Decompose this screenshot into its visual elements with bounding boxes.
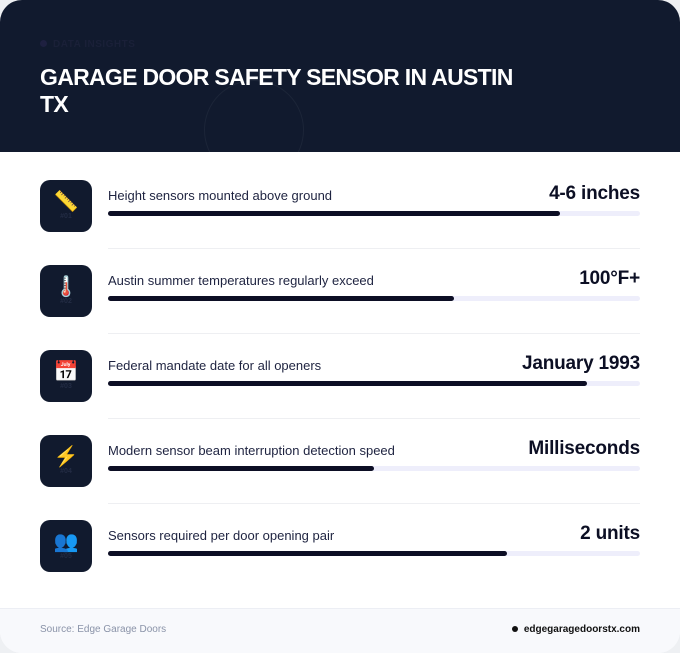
icon: calendar: 📅 — [54, 361, 78, 383]
title: GARAGE DOOR SAFETY SENSOR IN AUSTIN — [40, 64, 513, 90]
icon: thermometer: 🌡️ — [54, 276, 78, 298]
icon: lightning: #04 — [60, 468, 72, 475]
label: Austin summer temperatures regularly exceed — [108, 273, 374, 288]
icon: people — [40, 520, 92, 572]
icon: thermometer — [40, 265, 92, 317]
row 2 — [40, 265, 640, 317]
value: Milliseconds — [528, 438, 640, 459]
icon: calendar — [40, 350, 92, 402]
bar — [108, 296, 640, 301]
source: Source: Edge Garage Doors — [40, 624, 166, 635]
bar — [108, 466, 640, 471]
icon: lightning — [40, 435, 92, 487]
label: Federal mandate date for all openers — [108, 358, 321, 373]
row 5 — [40, 520, 640, 572]
icon: people: 👥 — [54, 531, 78, 553]
value: 100°F+ — [579, 268, 640, 289]
header — [0, 0, 680, 152]
tag: data insights: DATA INSIGHTS — [53, 39, 135, 50]
title: TX — [40, 91, 68, 117]
value: 2 units — [580, 523, 640, 544]
title — [40, 64, 513, 117]
bar — [108, 211, 640, 216]
label: Sensors required per door opening pair — [108, 528, 334, 543]
row 3 — [40, 350, 640, 402]
bar — [108, 381, 640, 386]
icon: ruler — [40, 180, 92, 232]
url: edgegaragedoorstx.com — [524, 624, 640, 635]
icon: ruler: 📏 — [54, 191, 78, 213]
value: January 1993 — [522, 353, 640, 374]
icon: calendar: #03 — [60, 383, 72, 390]
footer — [0, 608, 680, 653]
row 4 — [40, 435, 640, 487]
value: 4-6 inches — [549, 183, 640, 204]
icon: thermometer: #02 — [60, 298, 72, 305]
icon: lightning: ⚡ — [54, 446, 78, 468]
label: Modern sensor beam interruption detection speed — [108, 443, 395, 458]
row 1 — [40, 180, 640, 232]
icon: ruler: #01 — [60, 213, 72, 220]
icon: people: #05 — [60, 553, 72, 560]
bar — [108, 551, 640, 556]
label: Height sensors mounted above ground — [108, 188, 332, 203]
